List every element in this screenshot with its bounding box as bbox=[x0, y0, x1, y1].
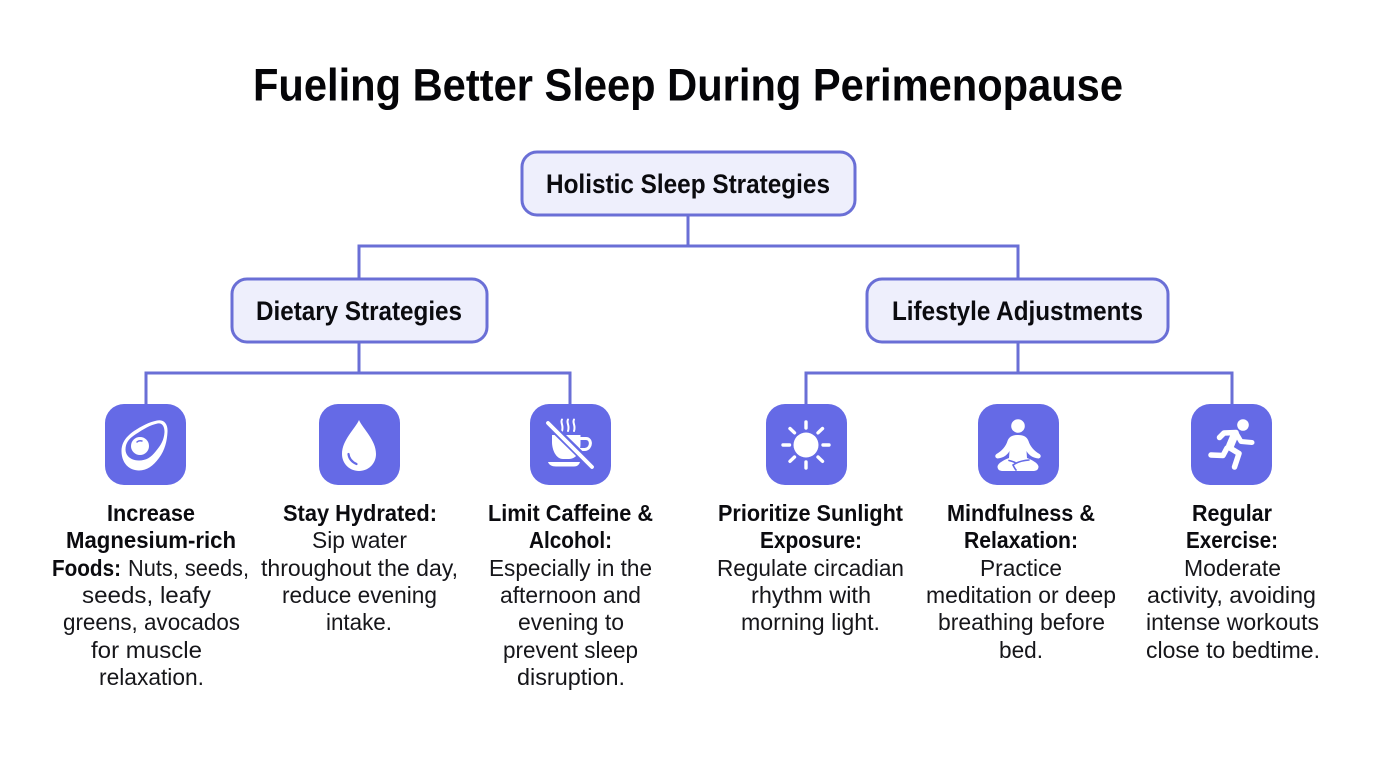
text: Limit Caffeine and Alcohol: afternoon and bbox=[500, 582, 641, 608]
text: Regular Exercise: intense workouts bbox=[1146, 609, 1319, 635]
text: Regular Exercise: activity, avoiding bbox=[1147, 582, 1316, 608]
text: Increase Magnesium-rich Foods: Increase bbox=[107, 500, 195, 526]
branch node: Dietary Strategies: Dietary Strategies bbox=[256, 296, 462, 326]
text: Regular Exercise: Exercise: bbox=[1186, 527, 1278, 553]
text: Regular Exercise: close to bedtime. bbox=[1146, 637, 1320, 663]
text: Stay Hydrated: intake. bbox=[326, 609, 392, 635]
text: Stay Hydrated: throughout the day, bbox=[261, 555, 458, 581]
icon: no caffeine cup bbox=[530, 404, 611, 485]
text: Prioritize Sunlight Exposure: Prioritize Sunlight bbox=[718, 500, 903, 526]
text: Mindfulness and Relaxation: breathing before bbox=[938, 609, 1105, 635]
text: Prioritize Sunlight Exposure: Exposure: bbox=[760, 527, 862, 553]
text: Mindfulness and Relaxation: Practice bbox=[980, 555, 1062, 581]
text: Increase Magnesium-rich Foods: relaxation. bbox=[99, 664, 204, 690]
text: Prioritize Sunlight Exposure: Regulate circadian bbox=[717, 555, 904, 581]
text: Regular Exercise: Moderate bbox=[1184, 555, 1281, 581]
icon: sun bbox=[766, 404, 847, 485]
icon: water drop bbox=[319, 404, 400, 485]
branch node: Lifestyle Adjustments: Lifestyle Adjustments bbox=[892, 296, 1143, 326]
text: Mindfulness and Relaxation bbox=[926, 500, 1116, 663]
text: Increase Magnesium-rich Foods: seeds, leafy bbox=[82, 582, 211, 608]
branch node: Lifestyle Adjustments bbox=[867, 279, 1168, 342]
branch node: Dietary Strategies bbox=[232, 279, 487, 342]
text: Limit Caffeine and Alcohol: disruption. bbox=[517, 664, 625, 690]
icon: avocado bbox=[105, 404, 186, 485]
text: Stay Hydrated bbox=[261, 500, 458, 635]
text: Increase Magnesium-rich Foods: for muscle bbox=[91, 637, 202, 663]
text: Mindfulness and Relaxation: bed. bbox=[999, 637, 1043, 663]
text: Mindfulness and Relaxation: Mindfulness & bbox=[947, 500, 1095, 526]
text: Stay Hydrated: Sip water bbox=[312, 527, 407, 553]
text: Prioritize Sunlight Exposure bbox=[717, 500, 904, 635]
text: Prioritize Sunlight Exposure: rhythm with bbox=[751, 582, 871, 608]
text: Regular Exercise bbox=[1146, 500, 1320, 663]
text: Limit Caffeine and Alcohol: Alcohol: bbox=[529, 527, 612, 553]
icon: meditation figure bbox=[978, 404, 1059, 485]
text: Mindfulness and Relaxation: Relaxation: bbox=[964, 527, 1078, 553]
text: Increase Magnesium-rich Foods: Foods: bbox=[52, 555, 121, 581]
icon: runner bbox=[1191, 404, 1272, 485]
root node: Holistic Sleep Strategies bbox=[522, 152, 855, 215]
title: Fueling Better Sleep During Perimenopause bbox=[253, 60, 1123, 110]
text: Increase Magnesium-rich Foods: Nuts, seeds, bbox=[128, 555, 249, 581]
text: Limit Caffeine and Alcohol bbox=[488, 500, 653, 690]
text: Mindfulness and Relaxation: meditation or deep bbox=[926, 582, 1116, 608]
text: Increase Magnesium-rich Foods: greens, avocados bbox=[63, 609, 240, 635]
text: Increase Magnesium-rich Foods: Magnesium-rich bbox=[66, 527, 236, 553]
text: Limit Caffeine and Alcohol: Especially in the bbox=[489, 555, 652, 581]
text: Limit Caffeine and Alcohol: evening to bbox=[518, 609, 624, 635]
root node: Holistic Sleep Strategies: Holistic Sleep Strategies bbox=[546, 169, 830, 199]
text: Limit Caffeine and Alcohol: Limit Caffeine & bbox=[488, 500, 653, 526]
text: Stay Hydrated: Stay Hydrated: bbox=[283, 500, 437, 526]
text: Limit Caffeine and Alcohol: prevent sleep bbox=[503, 637, 638, 663]
text: Stay Hydrated: reduce evening bbox=[282, 582, 437, 608]
text: Regular Exercise: Regular bbox=[1192, 500, 1272, 526]
text: Increase Magnesium-rich Foods bbox=[52, 500, 249, 690]
text: Prioritize Sunlight Exposure: morning light. bbox=[741, 609, 880, 635]
